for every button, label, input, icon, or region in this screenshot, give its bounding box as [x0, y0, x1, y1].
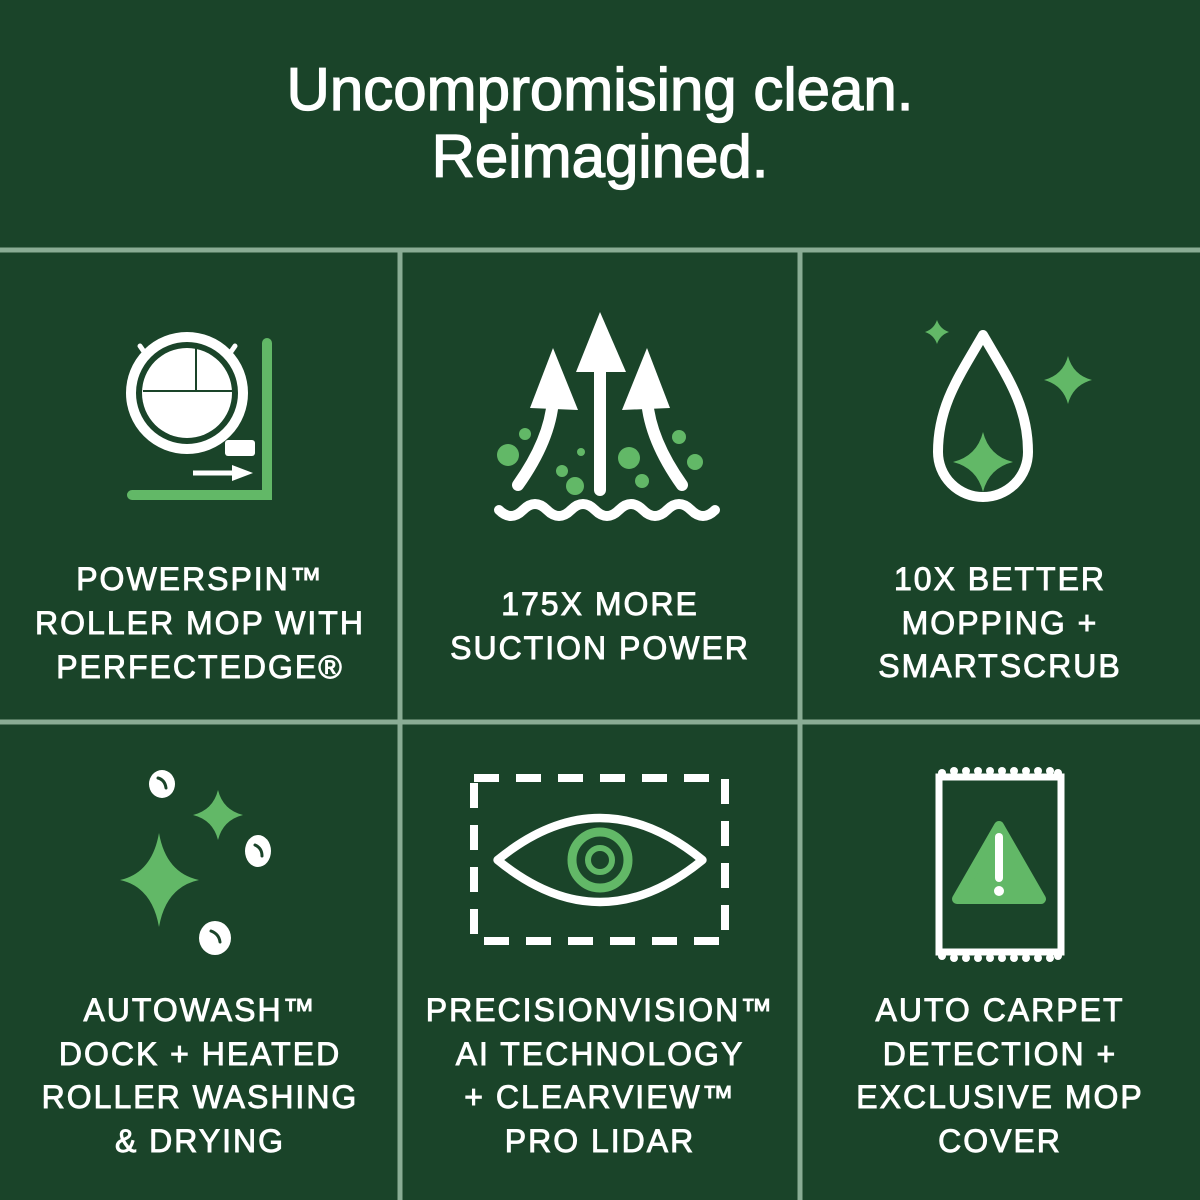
text: ROLLER MOP WITH [35, 605, 365, 641]
text: PERFECTEDGE® [56, 649, 344, 685]
icon: robot mop with edge [131, 337, 267, 495]
title: Reimagined. [432, 123, 768, 190]
title [287, 56, 913, 190]
icon: bubbles and sparkles [120, 770, 271, 955]
text: AUTO CARPET [876, 992, 1124, 1028]
title: Uncompromising clean. [287, 56, 913, 123]
panel: carpet detection [856, 767, 1144, 1159]
icon: arrows suction [497, 312, 715, 516]
panel: autowash [42, 770, 358, 1159]
text: ROLLER WASHING [42, 1079, 358, 1115]
text: & DRYING [115, 1123, 285, 1159]
text: COVER [938, 1123, 1062, 1159]
icon: eye in dashed frame [474, 778, 725, 941]
icon: rug with warning [938, 767, 1062, 962]
panel: precisionvision [426, 778, 774, 1159]
text: POWERSPIN™ [76, 561, 324, 597]
icon: water drop sparkle [925, 320, 1092, 497]
text: EXCLUSIVE MOP [856, 1079, 1144, 1115]
text: DOCK + HEATED [59, 1036, 341, 1072]
text: PRO LIDAR [505, 1123, 695, 1159]
text: MOPPING + [902, 605, 1098, 641]
panel: powerspin [35, 337, 365, 685]
text: PRECISIONVISION™ [426, 992, 774, 1028]
text: + CLEARVIEW™ [464, 1079, 736, 1115]
text: AUTOWASH™ [83, 992, 317, 1028]
text: SUCTION POWER [450, 630, 750, 666]
text: SMARTSCRUB [878, 648, 1122, 684]
text: AI TECHNOLOGY [456, 1036, 744, 1072]
text: 10X BETTER [894, 561, 1106, 597]
panel: suction [450, 312, 750, 666]
text: 175X MORE [501, 586, 699, 622]
panel: mopping [878, 320, 1122, 684]
text: DETECTION + [883, 1036, 1117, 1072]
